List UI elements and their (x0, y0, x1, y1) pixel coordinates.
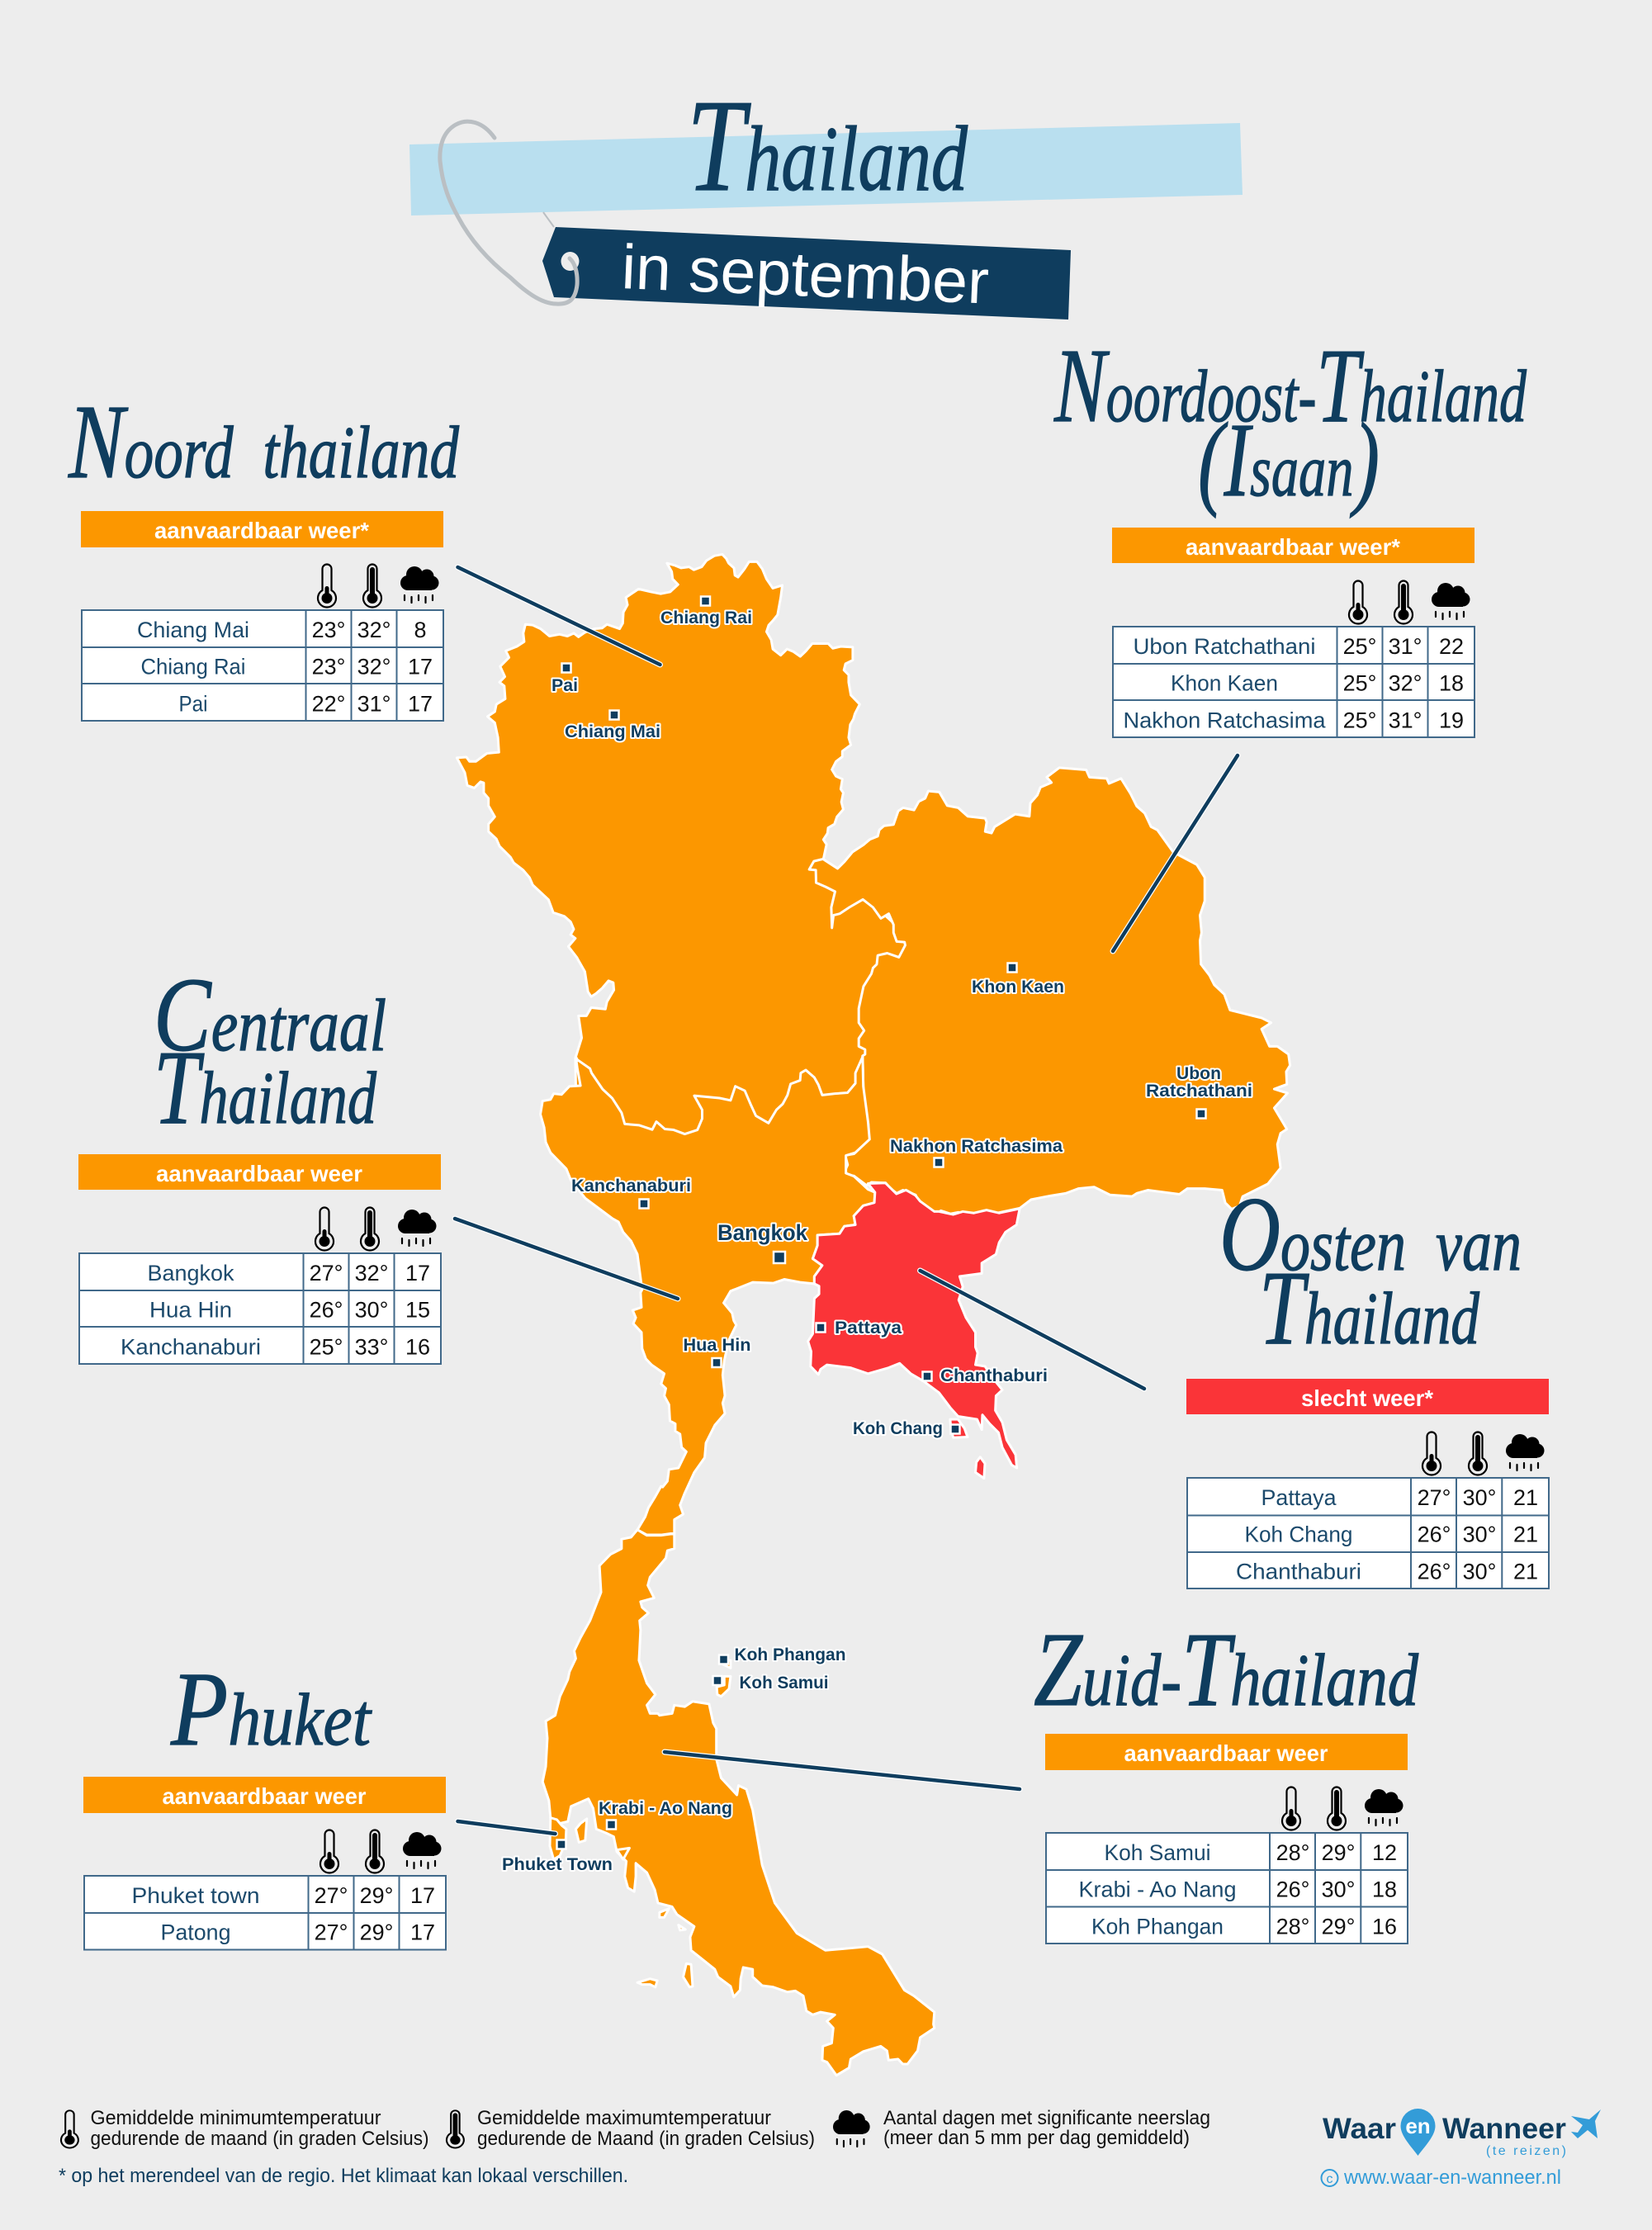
region: Zuid (542, 1530, 935, 2076)
table: 29° (1322, 1840, 1355, 1865)
table (1113, 627, 1474, 737)
legend: maximum temperature: Gemiddelde maximumtemperatuur (477, 2107, 771, 2129)
heading: Oosten van Thailand (1219, 1176, 1522, 1366)
icon: minimum temperature (318, 565, 336, 608)
city: Kanchanaburi (571, 1177, 691, 1209)
banner: aanvaardbaar weer* (154, 518, 369, 543)
table (1187, 1478, 1549, 1588)
table: Chiang Mai (137, 618, 249, 642)
table: Hua Hin (149, 1298, 232, 1323)
table: 22 (1439, 634, 1464, 659)
table: 17 (410, 1883, 435, 1908)
icon: minimum temperature (320, 1830, 338, 1873)
city: Chiang Rai: Chiang Rai (660, 608, 752, 627)
city: Hua Hin: Hua Hin (684, 1336, 751, 1355)
table: 17 (410, 1920, 435, 1945)
icon: rain days (400, 566, 439, 603)
city: Phuket Town (502, 1839, 613, 1874)
tag string (543, 212, 554, 227)
table: 26° (1276, 1877, 1309, 1902)
heading: Centraal Thailand (154, 956, 386, 1146)
table: 22° (312, 692, 345, 717)
pointer: Centraal (455, 1219, 678, 1299)
legend: maximum temperature: gedurende de Maand (in graden Celsius) (477, 2128, 815, 2150)
website credit: c (1326, 2172, 1332, 2186)
city: Ubon Ratchathani: Ubon (1176, 1064, 1221, 1083)
table: 29° (1322, 1914, 1355, 1939)
title band: Thailand (409, 72, 1243, 219)
heading: Zuid-Thailand: Zuid-Thailand (1034, 1611, 1419, 1728)
legend: minimum temperature: Gemiddelde minimumtemperatuur (91, 2107, 381, 2129)
table: 27° (315, 1920, 348, 1945)
title tag: in september: in september (620, 232, 990, 318)
region: Noordoost (809, 768, 1290, 1214)
table: 16 (1372, 1914, 1397, 1939)
panel: Oosten (1186, 1379, 1549, 1588)
table: 32° (1389, 670, 1422, 695)
city: Chiang Rai (660, 596, 752, 627)
table: 30° (1322, 1877, 1355, 1902)
table (82, 610, 443, 721)
banner: aanvaardbaar weer (156, 1161, 362, 1186)
table: 17 (405, 1261, 430, 1285)
table: Kanchanaburi (121, 1334, 261, 1359)
table (79, 1253, 441, 1364)
legend: rain days (833, 2107, 1210, 2149)
city: Koh Chang: Koh Chang (853, 1419, 943, 1438)
city: Koh Phangan: Koh Phangan (735, 1645, 845, 1664)
heading: Phuket: Phuket (170, 1650, 372, 1768)
icon: minimum temperature (1422, 1432, 1441, 1475)
table: 31° (1389, 708, 1422, 733)
city: Khon Kaen: Khon Kaen (972, 978, 1064, 997)
table: 27° (315, 1883, 348, 1908)
city: Nakhon Ratchasima (890, 1137, 1063, 1167)
city: Pattaya: Pattaya (835, 1319, 902, 1338)
table: Pai (178, 692, 208, 717)
pointer: Zuid (665, 1752, 1020, 1789)
logo: Waar en Wanneer (1323, 2109, 1601, 2158)
table: 31° (357, 692, 391, 717)
icon: minimum temperature (1282, 1787, 1300, 1830)
icon: maximum temperature (361, 1207, 379, 1251)
banner (78, 1154, 441, 1190)
table: 27° (310, 1261, 343, 1285)
table: 25° (310, 1334, 343, 1359)
panel: Phuket (83, 1777, 446, 1950)
table: Pattaya (1261, 1485, 1337, 1510)
table: Patong (160, 1920, 231, 1945)
city: Chanthaburi: Chanthaburi (940, 1366, 1048, 1385)
city: Ubon Ratchathani (1146, 1064, 1252, 1118)
icon: maximum temperature (1469, 1432, 1487, 1475)
legend: rain days: (meer dan 5 mm per dag gemiddeld) (883, 2127, 1190, 2149)
table: 32° (355, 1261, 388, 1285)
city: Khon Kaen (972, 963, 1064, 997)
table: 28° (1276, 1914, 1309, 1939)
table: 30° (1463, 1559, 1496, 1584)
heading: Noordoost-Thailand (Isaan): (Isaan) (1198, 401, 1380, 518)
banner (1186, 1379, 1549, 1414)
tag ring (440, 121, 577, 304)
banner (83, 1777, 446, 1813)
city: Nakhon Ratchasima: Nakhon Ratchasima (890, 1137, 1063, 1156)
icon: maximum temperature (366, 1830, 384, 1873)
region: Noord (457, 554, 911, 1156)
title tag: in september (542, 227, 1071, 320)
table: 21 (1513, 1485, 1538, 1510)
table: 25° (1343, 708, 1376, 733)
city: Kanchanaburi: Kanchanaburi (571, 1177, 691, 1195)
table: 30° (1463, 1485, 1496, 1510)
panel: Centraal (78, 1154, 441, 1364)
website credit: www.waar-en-wanneer.nl (1343, 2166, 1561, 2189)
city: Hua Hin (684, 1336, 751, 1367)
title band: Thailand: Thailand (687, 72, 968, 219)
logo: Waar en Wanneer: en (1405, 2114, 1431, 2138)
table: 26° (310, 1298, 343, 1323)
pointer: Noord (457, 567, 660, 665)
banner (81, 511, 443, 547)
icon: maximum temperature (1328, 1787, 1346, 1830)
table: 8 (414, 618, 427, 642)
city: Krabi - Ao Nang: Krabi - Ao Nang (599, 1799, 732, 1818)
table: 29° (360, 1883, 393, 1908)
city: Chiang Mai (565, 710, 660, 741)
table: 29° (360, 1920, 393, 1945)
table: Koh Chang (1245, 1522, 1352, 1547)
table: 15 (405, 1298, 430, 1323)
table: Koh Phangan (1091, 1914, 1224, 1939)
table: 33° (355, 1334, 388, 1359)
legend: maximum temperature (447, 2107, 815, 2150)
icon: minimum temperature (1349, 581, 1367, 624)
region: Oosten (808, 1183, 1020, 1479)
pointer: Noordoost (1113, 755, 1238, 951)
heading: Noord thailand: Noord thailand (68, 383, 460, 500)
logo: Waar en Wanneer: (te reizen) (1486, 2144, 1566, 2158)
logo: Waar en Wanneer: Waar (1323, 2113, 1396, 2145)
table: 25° (1343, 634, 1376, 659)
panel: Zuid (1045, 1734, 1408, 1944)
table: Khon Kaen (1171, 670, 1278, 695)
heading: Centraal Thailand: Thailand (154, 1029, 377, 1146)
banner (1112, 528, 1474, 563)
table: Phuket town (132, 1883, 259, 1908)
heading: Noordoost-Thailand (Isaan) (1053, 327, 1527, 518)
table: 18 (1372, 1877, 1397, 1902)
region: Centraal (541, 1057, 875, 1535)
table: Krabi - Ao Nang (1078, 1877, 1237, 1902)
banner: slecht weer* (1301, 1385, 1433, 1411)
city: Koh Samui: Koh Samui (740, 1674, 829, 1693)
banner: aanvaardbaar weer (1124, 1740, 1328, 1766)
table: 30° (1463, 1522, 1496, 1547)
city: Chiang Mai: Chiang Mai (565, 722, 660, 741)
table: 21 (1513, 1559, 1538, 1584)
icon: rain days (1506, 1434, 1544, 1470)
icon: rain days (1432, 583, 1470, 619)
city: Pai (551, 664, 578, 695)
icon: rain days (398, 1210, 436, 1246)
banner: aanvaardbaar weer* (1186, 534, 1400, 560)
banner (1045, 1734, 1408, 1770)
table: 32° (357, 654, 391, 679)
pointer: Phuket (457, 1821, 555, 1834)
heading: Oosten van Thailand: Oosten van (1219, 1176, 1522, 1293)
table: 23° (312, 654, 345, 679)
table: 31° (1389, 634, 1422, 659)
city: Bangkok (717, 1220, 808, 1263)
table: 27° (1418, 1485, 1451, 1510)
logo: Waar en Wanneer: Wanneer (1442, 2113, 1566, 2145)
table: 32° (357, 618, 391, 642)
table: 26° (1418, 1559, 1451, 1584)
icon: maximum temperature (1394, 581, 1413, 624)
table: Chiang Rai (140, 654, 246, 679)
table: Bangkok (147, 1261, 234, 1285)
heading: Noordoost-Thailand (Isaan): Noordoost-Thailand (1053, 327, 1527, 444)
footnote: * op het merendeel van de regio. Het klimaat kan lokaal verschillen. (59, 2165, 628, 2187)
city: Ubon Ratchathani: Ratchathani (1146, 1082, 1252, 1101)
table: 16 (405, 1334, 430, 1359)
table: Nakhon Ratchasima (1123, 708, 1326, 733)
table: 30° (355, 1298, 388, 1323)
icon: rain days (1365, 1789, 1403, 1825)
table: 12 (1372, 1840, 1397, 1865)
table (84, 1876, 446, 1950)
icon: minimum temperature (315, 1207, 334, 1251)
table: 21 (1513, 1522, 1538, 1547)
city: Krabi - Ao Nang (599, 1799, 732, 1830)
heading: Centraal Thailand: Centraal (154, 956, 386, 1073)
table: 18 (1439, 670, 1464, 695)
table: Koh Samui (1105, 1840, 1210, 1865)
legend: minimum temperature (61, 2107, 428, 2150)
city: Bangkok: Bangkok (717, 1220, 808, 1245)
table: 17 (408, 654, 433, 679)
map of Thailand (457, 554, 1290, 2076)
icon: maximum temperature (363, 565, 381, 608)
table: 26° (1418, 1522, 1451, 1547)
legend: rain days: Aantal dagen met significante neerslag (883, 2107, 1210, 2129)
table: 23° (312, 618, 345, 642)
table: Ubon Ratchathani (1133, 634, 1316, 659)
table: 17 (408, 692, 433, 717)
city: Phuket Town: Phuket Town (502, 1855, 613, 1874)
table (1046, 1833, 1408, 1944)
heading: Oosten van Thailand: Thailand (1259, 1249, 1480, 1366)
legend: minimum temperature: gedurende de maand (in graden Celsius) (91, 2128, 429, 2150)
table: 19 (1439, 708, 1464, 733)
panel: Noordoost (1112, 528, 1474, 737)
panel: Noord (81, 511, 443, 721)
city: Pai: Pai (551, 676, 578, 695)
icon: rain days (403, 1832, 441, 1868)
banner: aanvaardbaar weer (162, 1783, 367, 1809)
table: 28° (1276, 1840, 1309, 1865)
pointer: Oosten (920, 1271, 1144, 1389)
table: 25° (1343, 670, 1376, 695)
table: Chanthaburi (1236, 1559, 1361, 1584)
